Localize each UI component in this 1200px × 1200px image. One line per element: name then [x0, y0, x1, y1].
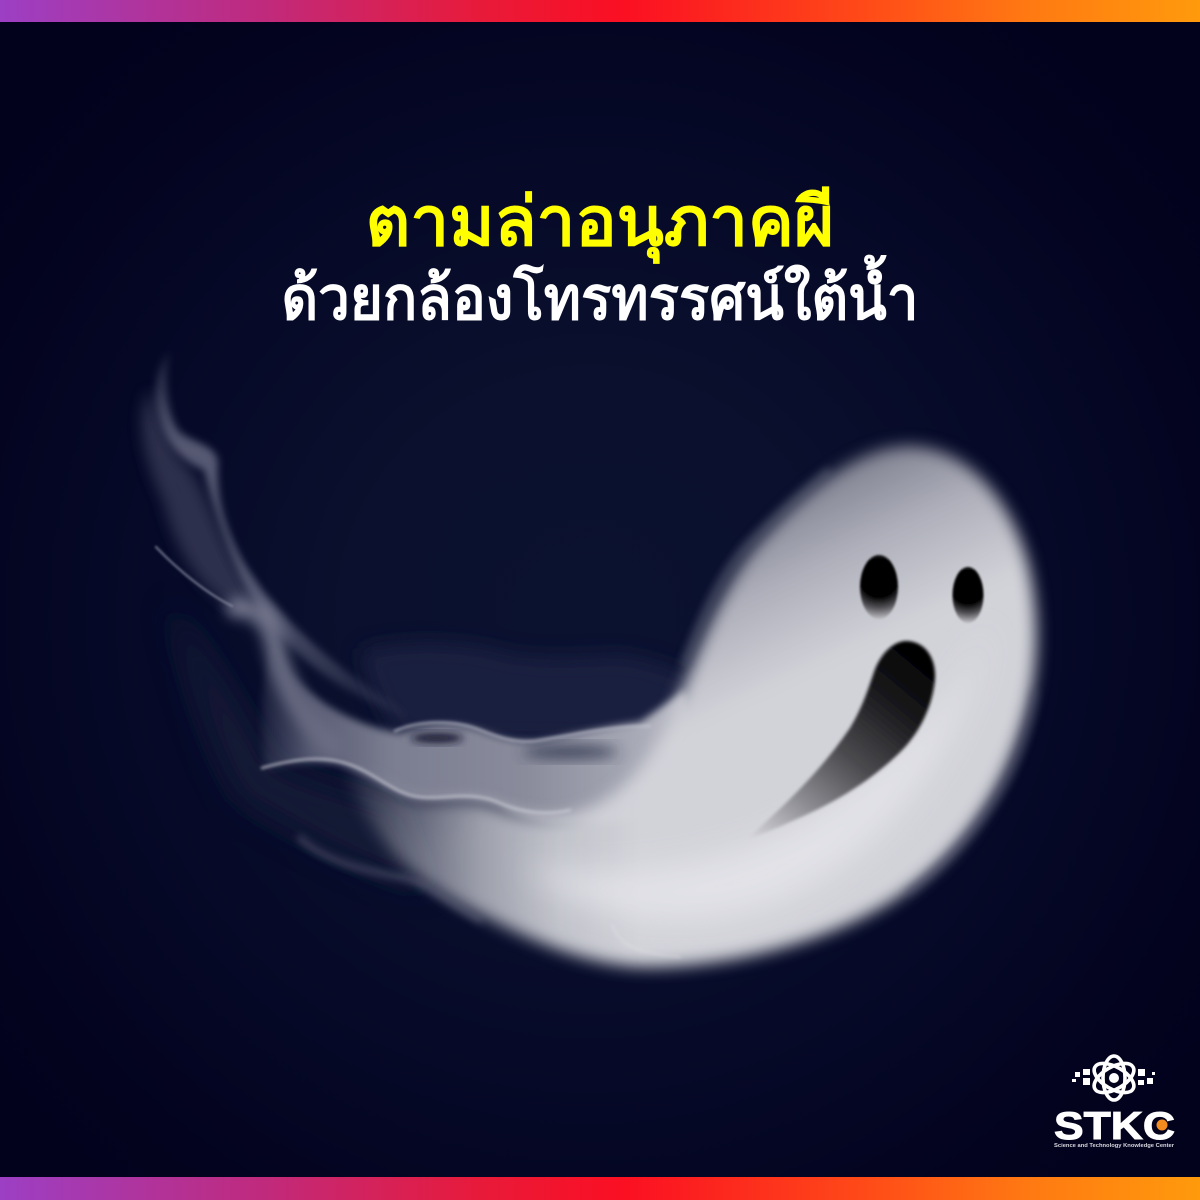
- faint upper smoke veil: [360, 642, 695, 745]
- logo orange dot: [1156, 1120, 1168, 1130]
- head-left smoke wisp: [684, 470, 830, 665]
- title: yellow heading: ตามล่าอนุภาคผี: [366, 184, 834, 260]
- top gradient bar: [0, 0, 1200, 22]
- dark haze under tail: [170, 600, 430, 890]
- subtitle: white heading: ด้วยกล้องโทรทรรศน์ใต้น้ำ: [281, 265, 919, 332]
- logo atom emblem: [1089, 1056, 1139, 1100]
- smoke band between ridges: [262, 650, 710, 825]
- tail wisp: thin tip: [156, 547, 232, 606]
- ghost body: [340, 446, 1036, 967]
- illustration: smoky ghost: [136, 358, 1050, 980]
- icon: ghost left eye: [860, 555, 898, 619]
- tail haze: far left: [142, 390, 256, 612]
- logo tagline: Science and Technology Knowledge Center: [1054, 1143, 1175, 1149]
- outer smoke veil at right edge: [907, 690, 1035, 894]
- logo pixel squares: [1072, 1069, 1155, 1085]
- bottom gradient bar: [0, 1177, 1200, 1200]
- dark smoke pockets: [411, 733, 618, 759]
- tail wisp: bright knot: [236, 608, 330, 745]
- icon: ghost mouth: [747, 641, 935, 839]
- tail wisp: upper: [156, 350, 410, 716]
- bright smoke ridges: [262, 723, 680, 957]
- body highlight: [520, 620, 990, 919]
- logo wordmark: STKC: [1054, 1105, 1175, 1148]
- icon: ghost right eye: [952, 567, 984, 623]
